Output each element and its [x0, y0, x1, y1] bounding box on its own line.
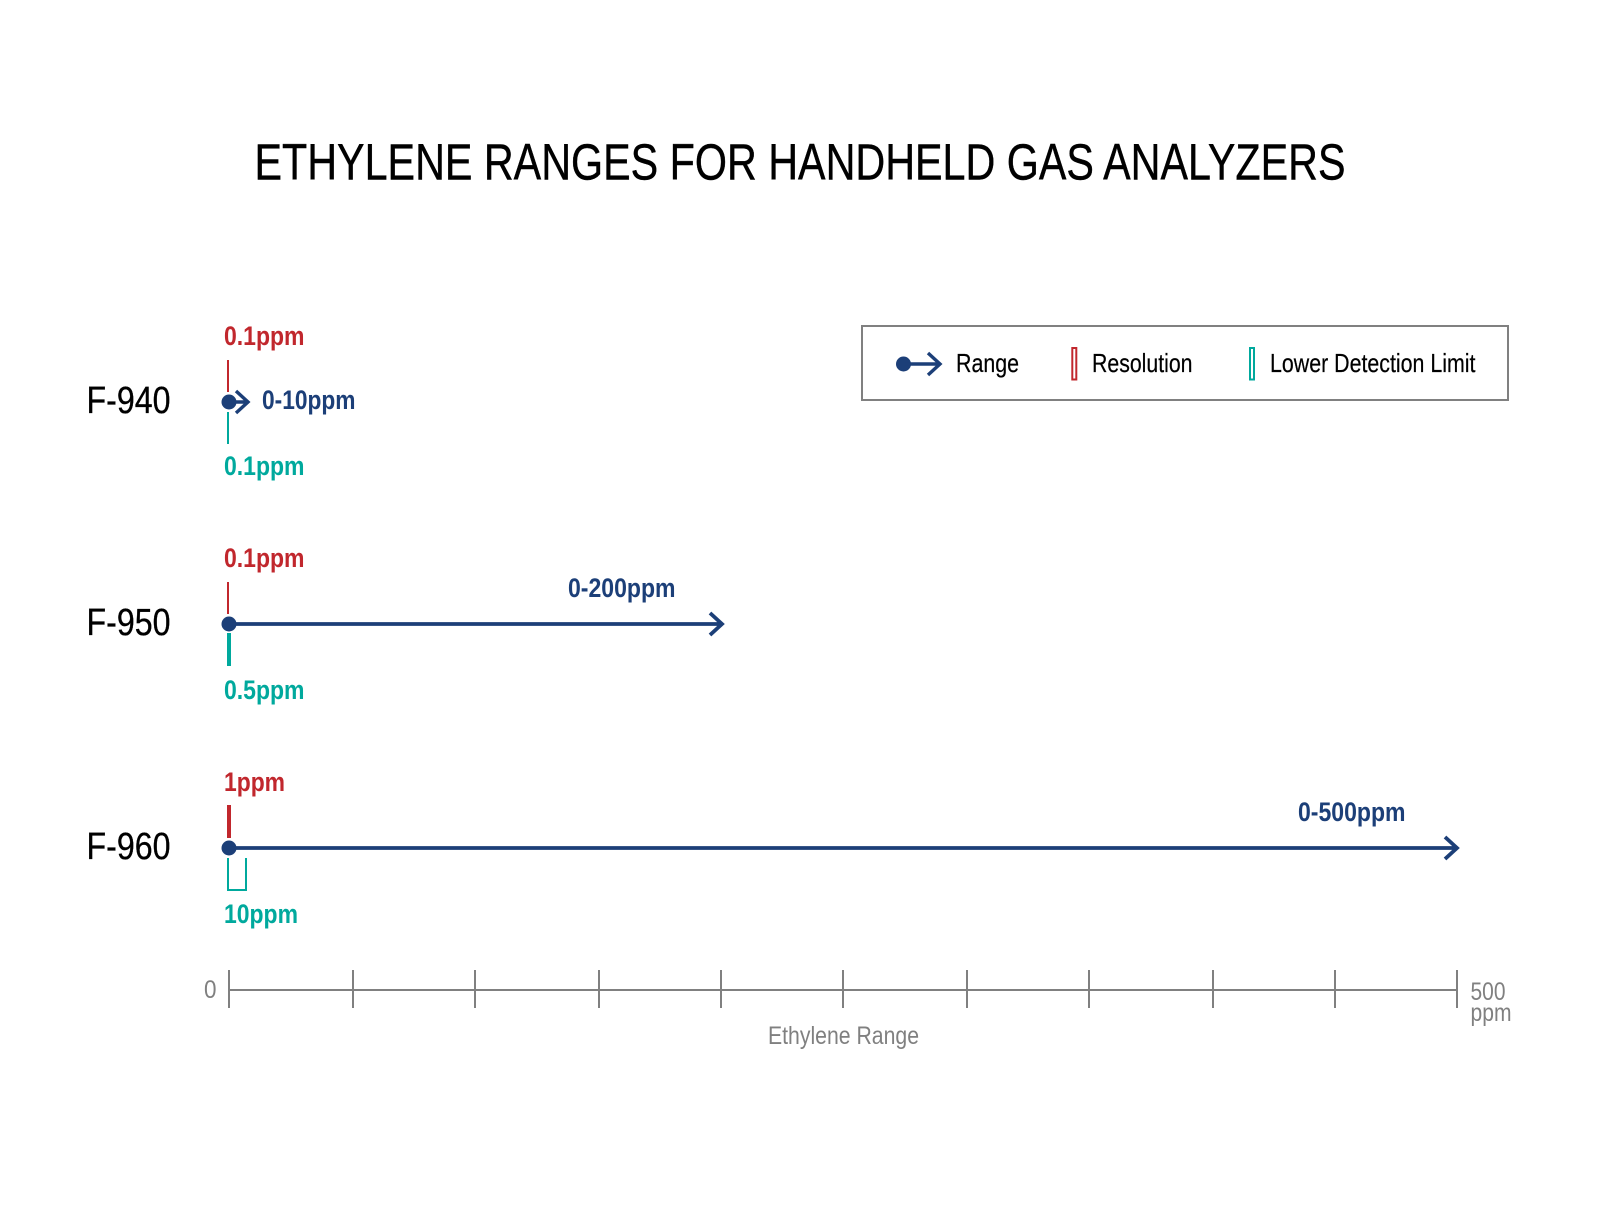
- legend: detection limit icon: [1250, 348, 1254, 380]
- row: F-950: [86, 543, 722, 705]
- range arrow: [222, 391, 248, 413]
- resolution mark: [227, 805, 231, 838]
- axis end label: 500: [1470, 978, 1506, 1006]
- legend: resolution icon: [1072, 348, 1076, 380]
- legend: detection limit label: Lower Detection Limit: [1270, 348, 1476, 378]
- axis start label: 0: [204, 976, 216, 1004]
- detection limit mark: [227, 412, 229, 444]
- detection limit value: 0.1ppm: [224, 451, 304, 481]
- model label: F-960: [86, 826, 170, 868]
- row: F-940: [86, 321, 356, 481]
- resolution mark: [227, 582, 229, 614]
- resolution mark: [227, 360, 229, 392]
- model label: F-940: [86, 380, 170, 422]
- resolution value: 0.1ppm: [224, 543, 304, 573]
- range value: 0-200ppm: [568, 573, 676, 603]
- axis unit label: ppm: [1470, 999, 1512, 1027]
- resolution value: 0.1ppm: [224, 321, 304, 351]
- legend: resolution label: Resolution: [1092, 348, 1192, 378]
- legend: range icon: [896, 353, 940, 375]
- legend: [862, 326, 1508, 400]
- model label: F-950: [86, 602, 170, 644]
- detection limit mark: [227, 633, 231, 666]
- detection limit bracket: [228, 858, 246, 890]
- range value: 0-10ppm: [262, 385, 356, 415]
- resolution value: 1ppm: [224, 767, 285, 797]
- range arrow: [222, 837, 1457, 859]
- legend: range label: Range: [956, 348, 1019, 378]
- title: ETHYLENE RANGES FOR HANDHELD GAS ANALYZERS: [254, 134, 1346, 190]
- range arrow: [222, 613, 722, 635]
- range value: 0-500ppm: [1298, 797, 1406, 827]
- detection limit value: 10ppm: [224, 899, 298, 929]
- axis title: Ethylene Range: [768, 1022, 919, 1050]
- row: F-960: [86, 767, 1457, 929]
- detection limit value: 0.5ppm: [224, 675, 304, 705]
- axis: [204, 970, 1512, 1050]
